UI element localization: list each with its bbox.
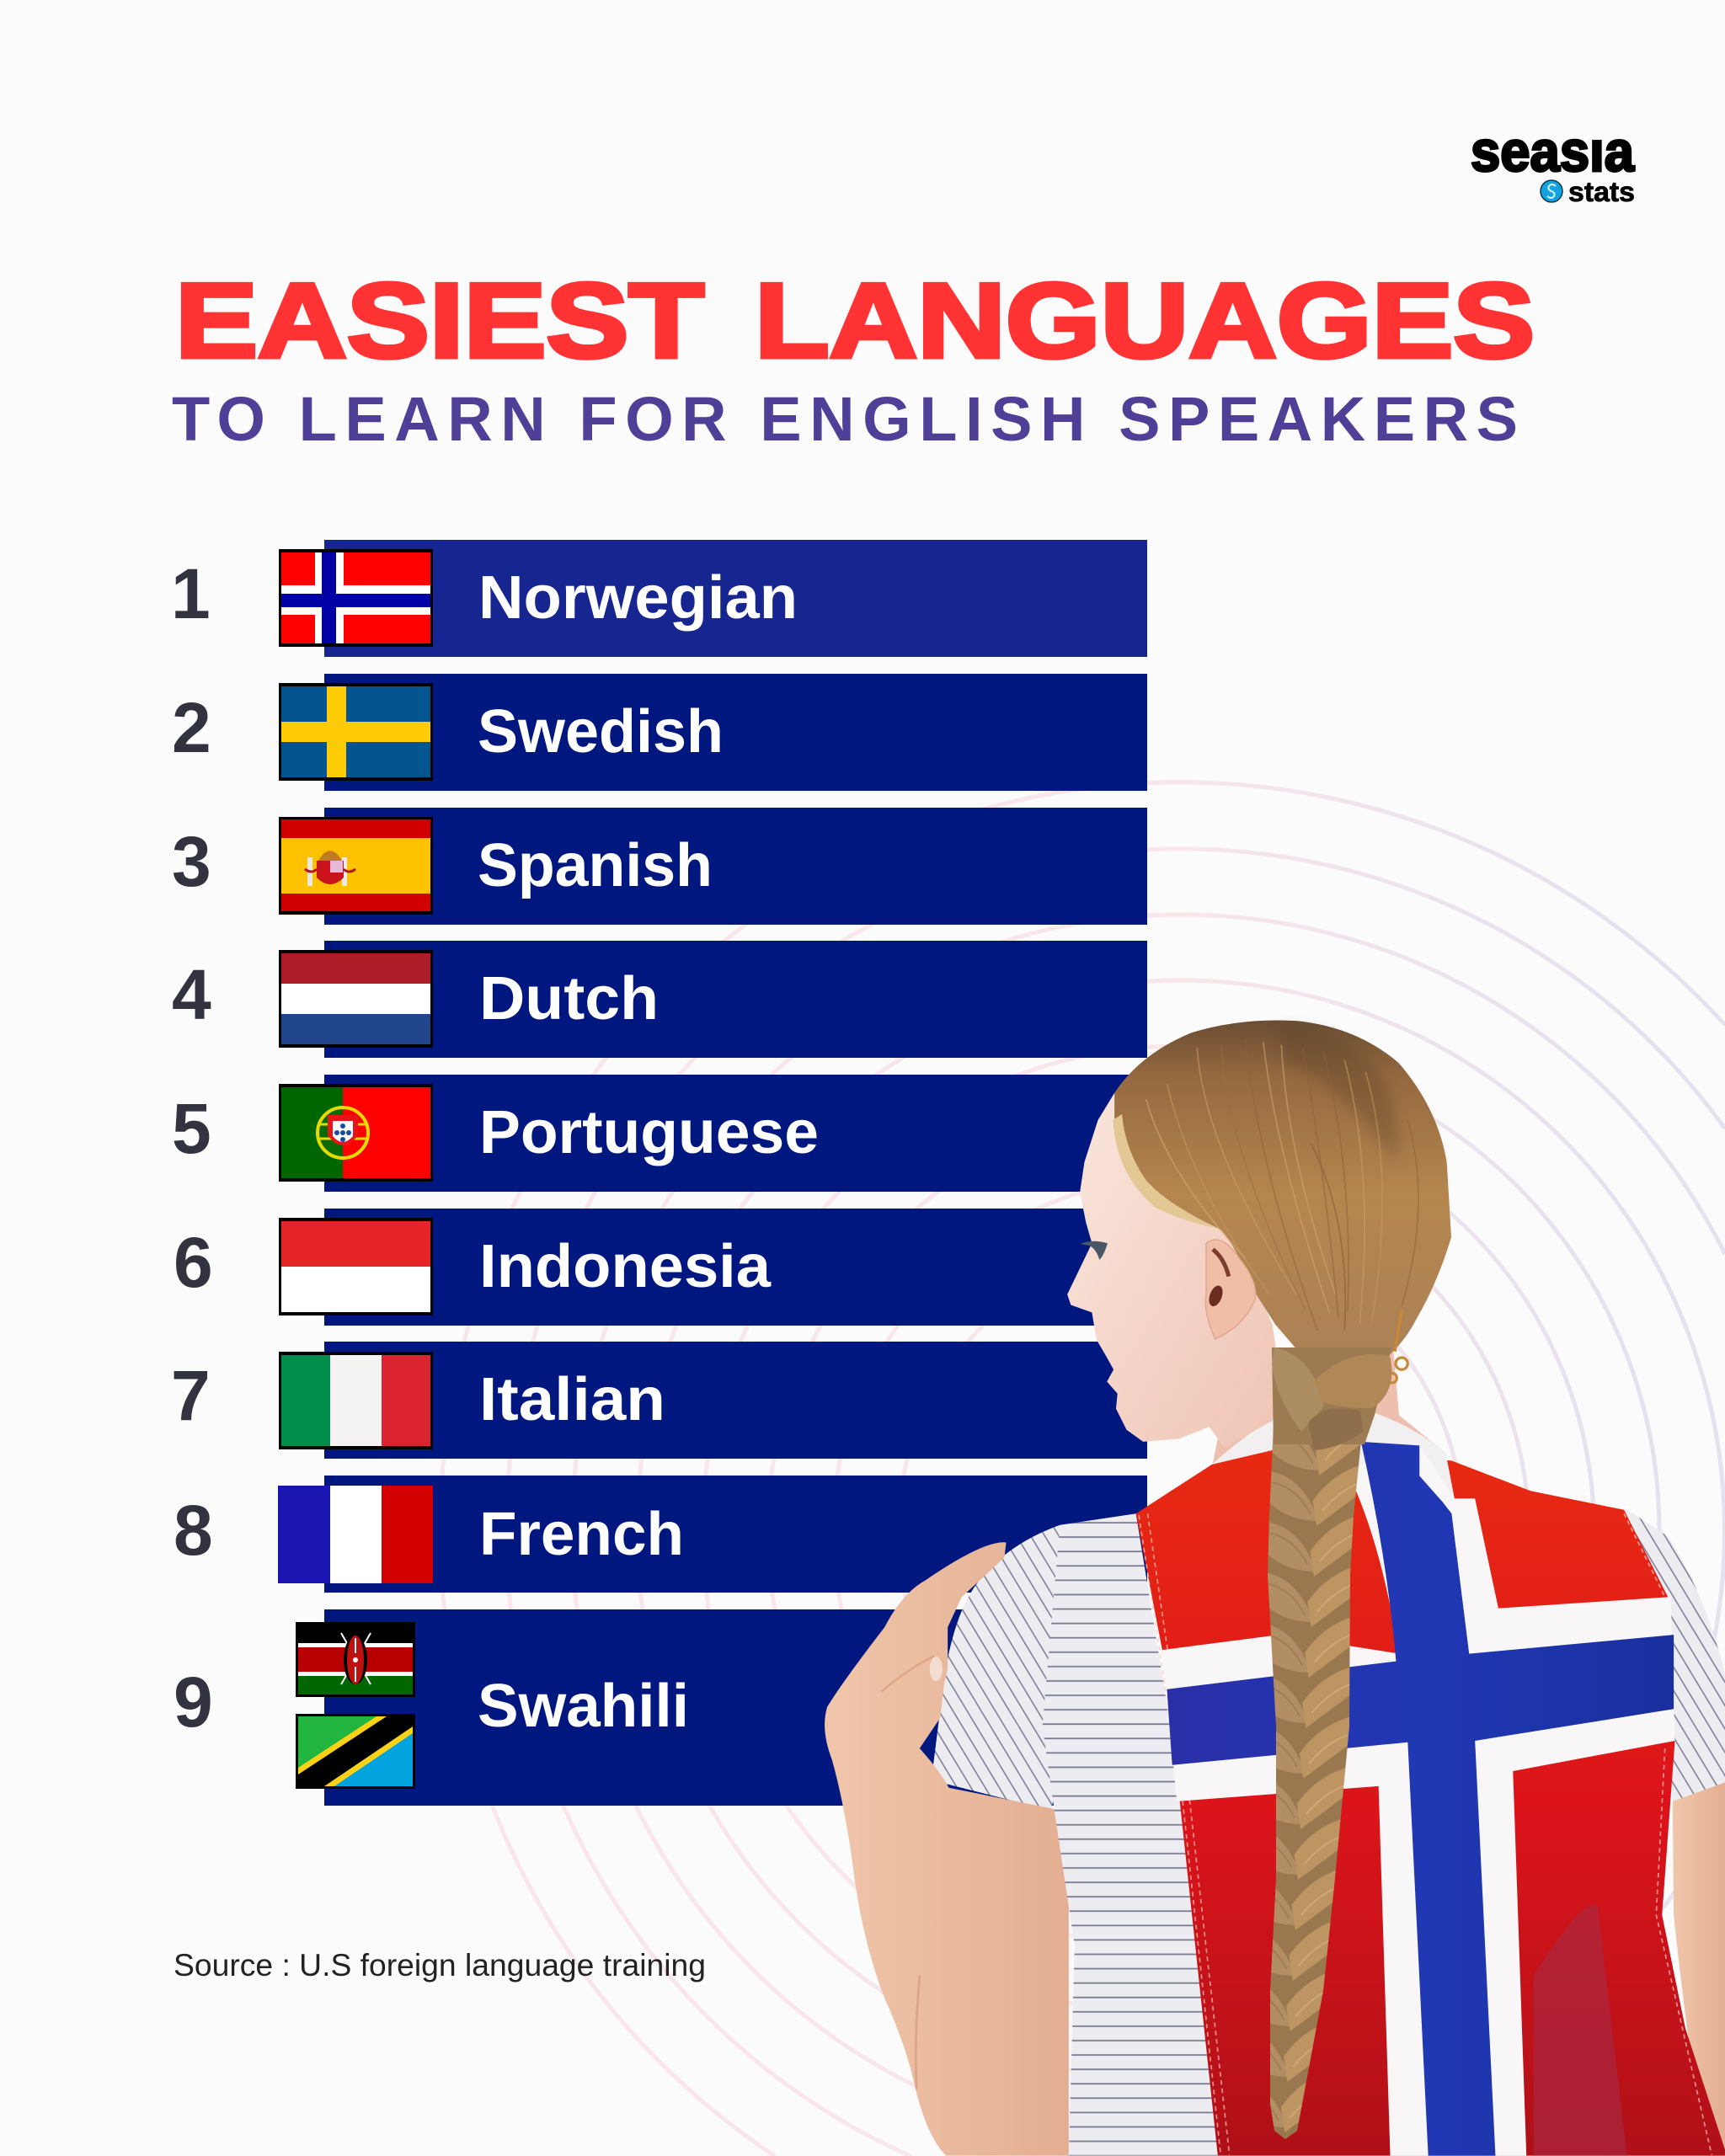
title: LANGUAGES [755,261,1535,380]
row 5: Portuguese [172,1075,1147,1192]
row 5: Portuguese: 5 [172,1089,211,1168]
row 4: Dutch: Dutch [479,965,659,1033]
row 9: Swahili: Swahili [478,1673,689,1740]
row 4: Dutch: 4 [172,955,211,1034]
left arm and hand [825,1542,1069,2156]
crown shadow [1281,1027,1397,1162]
photo: woman with Norwegian flag and braid [825,1021,1725,2156]
row 3: Spanish: 3 [172,822,211,901]
arm crease [916,1976,920,2089]
row 2: Swedish [172,674,1147,791]
flag: Italy [279,1352,433,1449]
row 1: Norwegian: Norwegian [478,564,798,632]
flag: Indonesia [279,1218,433,1315]
flag: Netherlands [279,950,433,1048]
row 1: Norwegian [171,540,1147,657]
row 7: Italian: 7 [171,1356,211,1435]
logo: seasia stats [1471,118,1635,207]
flag: France [278,1486,433,1583]
concentric rings background [441,782,1725,2156]
row 1: Norwegian: 1 [171,554,211,633]
row 3: Spanish: Spanish [478,832,713,899]
body [825,1348,1725,2156]
row 7: Italian: Italian [479,1366,665,1433]
braid twist [1272,1348,1324,1432]
face and neck [1067,1093,1281,1448]
source note: Source : U.S foreign language training [174,1948,706,1983]
hair [1114,1021,1451,1369]
row 9: Swahili [174,1609,1147,1806]
right arm [1673,1782,1725,2156]
flag: Sweden [279,683,433,781]
row 8: French [174,1476,1147,1593]
shirt back [1043,1513,1218,2156]
row 8: French: French [479,1501,684,1568]
shirt sleeve [932,1525,1083,1811]
flag: Tanzania [296,1714,415,1789]
flag: Spain [279,817,433,915]
hair clip [1387,1310,1407,1383]
row 6: Indonesia [174,1209,1147,1326]
row 7: Italian [171,1342,1147,1459]
row 2: Swedish: Swedish [478,698,724,766]
row 8: French: 8 [174,1491,213,1570]
blonde highlight [1113,1114,1218,1228]
thumb nail [930,1657,943,1681]
neck [1212,1348,1445,1483]
title: EASIEST [175,261,704,380]
braid [1268,1348,1391,2139]
braid twist base [1272,1348,1391,1444]
row 4: Dutch [172,941,1147,1058]
ear [1205,1240,1256,1339]
thumb line [882,1656,934,1692]
collar [1212,1407,1455,1498]
flag: Norway [279,549,433,647]
hair streaks [1146,1039,1418,1331]
row 2: Swedish: 2 [172,688,211,767]
flag: Portugal [279,1084,433,1182]
row 3: Spanish [172,808,1147,925]
flag white cross [1162,1445,1675,2156]
subtitle: TO LEARN FOR ENGLISH SPEAKERS [172,384,1518,454]
vest bottom shade [1534,1905,1627,2156]
shirt right [1624,1508,1725,1801]
flag: Kenya [296,1622,415,1697]
head [1067,1021,1451,1448]
eye [1081,1241,1108,1260]
logo: seasia stats: seasia [1471,120,1635,184]
row 5: Portuguese: Portuguese [479,1099,819,1166]
row 6: Indonesia: 6 [174,1223,213,1302]
row 6: Indonesia: Indonesia [479,1233,772,1300]
flag blue cross [1167,1442,1674,2156]
vest stitching [1139,1513,1712,2155]
logo: seasia stats: stats [1568,176,1635,207]
flag vest red [1136,1445,1725,2156]
row 9: Swahili: 9 [174,1662,213,1742]
